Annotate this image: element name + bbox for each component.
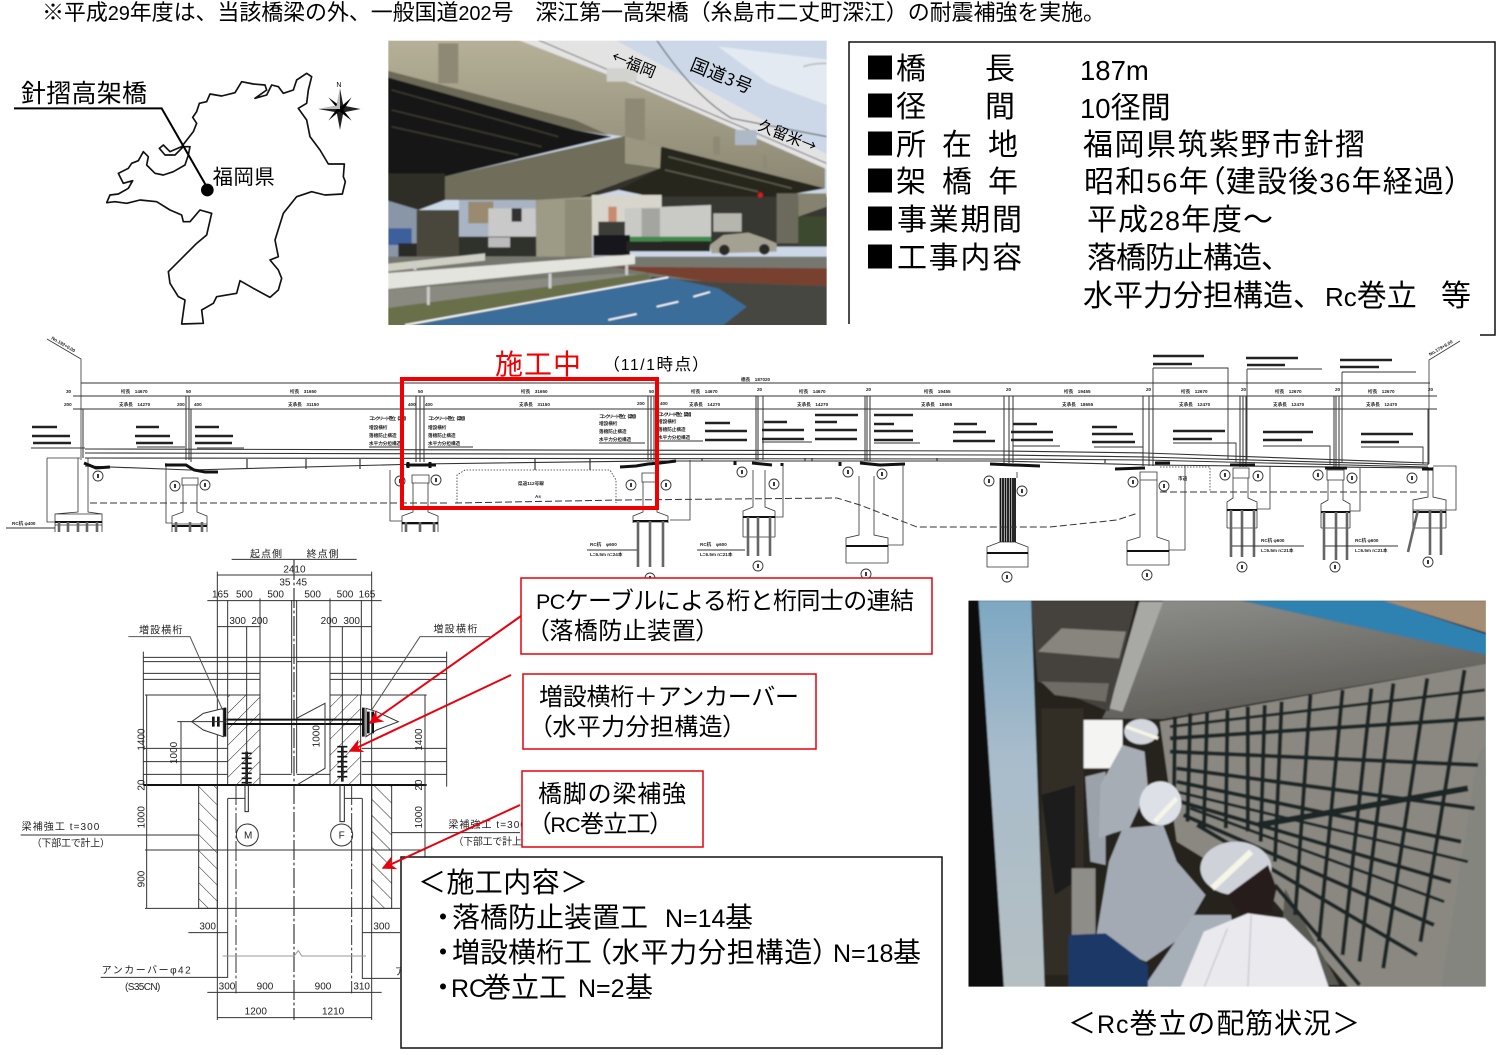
elevation dimension text: 20 (1428, 387, 1434, 392)
elevation dimension text: 400 (660, 401, 668, 406)
elevation dimension text: RC杭 φ600 (700, 541, 727, 548)
elevation dimension text: 20 (1335, 387, 1341, 392)
dimension labels: 終点側 (307, 547, 339, 560)
elevation dimension text: 50 (418, 389, 424, 394)
photo label: to Kurume: 久留米→ (755, 114, 820, 157)
dimension labels: 200 (251, 616, 268, 627)
elevation dimension text: 20 (757, 387, 763, 392)
ground line (90, 492, 1427, 527)
pier P5 (743, 463, 783, 537)
elevation dimension text (12, 336, 1454, 558)
dimension labels: 900 (257, 981, 274, 992)
spec: length (865, 44, 1149, 88)
elevation dimension text: L=6.5m n=21本 (700, 551, 733, 558)
photo scene (385, 40, 832, 327)
girder slab lines (143, 652, 447, 787)
bearing symbol M: M (244, 831, 252, 842)
elevation dimension text: コンクリート巻立（梁幅） (428, 415, 468, 422)
rebar grid (1170, 670, 1485, 985)
callout: pier beam reinforcement (522, 771, 703, 847)
dimension labels: 300 (373, 921, 390, 932)
dimension labels: 200 (321, 616, 338, 627)
elevation dimension text: 増設横桁 (428, 424, 447, 431)
elevation dimension text: 落橋防止構造 (658, 426, 686, 433)
workers (1085, 772, 1106, 865)
anchor plates (213, 708, 373, 737)
elevation dimension text: 20 (866, 387, 872, 392)
photo scene (960, 595, 1495, 995)
elevation dimension text: 支承長 12470 (1273, 401, 1305, 408)
work item: bridge fall prevention: ・ (429, 902, 457, 933)
dimension labels: （下部工で計上） (32, 838, 110, 850)
label: under construction: 施工中 (495, 349, 581, 380)
spec: location: 所 (896, 129, 926, 162)
dimension lines side (145, 695, 425, 908)
elevation dimension text: No.179+6.00 (1428, 339, 1454, 357)
elevation dimension text: 50 (649, 389, 655, 394)
elevation dimension text: 県道112号線 (518, 480, 544, 487)
work item: RC jacketing: N=2 (578, 975, 625, 1003)
elevation dimension text: 200 (64, 402, 72, 407)
panel: work contents (401, 857, 942, 1048)
lower hatched RC jacket (199, 785, 392, 908)
spec: project period: 事業期間 (897, 204, 1022, 237)
photo: rebar work under the beam (960, 595, 1495, 995)
upper dimensions (207, 559, 382, 627)
elevation dimension text: コンクリート巻立（梁幅） (369, 415, 409, 422)
dimension labels: 20 (414, 779, 425, 791)
elevation dimension text: 桁長 14670 (691, 388, 718, 395)
spec: work details: Rc巻立 (1325, 280, 1417, 313)
icon: compass rose: N (336, 82, 341, 89)
spec: year built (865, 157, 1460, 201)
annotation leaders (31, 368, 1423, 464)
work item: added cross girder: ・ (429, 937, 457, 968)
pier P8 (1127, 465, 1185, 565)
callout: PC cable: PCケーブルによる桁と桁同士の連結 (536, 588, 914, 615)
spec: length: 橋 (896, 53, 926, 86)
dimension labels: アンカーバーφ42 (102, 964, 191, 976)
elevation dimension text: 桁長 12670 (1181, 388, 1208, 395)
spec: work details: 落橋防止構造、 (1087, 242, 1291, 275)
elevation dimension text: 桁長 19455 (924, 388, 951, 395)
elevation dimension text: 200 (177, 402, 185, 407)
arrow: RC jacket (383, 805, 520, 868)
abutment A2 (1413, 466, 1456, 528)
elevation dimension text: RC杭 φ400 (12, 520, 36, 527)
elevation dimension text: 20 (1241, 387, 1247, 392)
dimension labels: ア (395, 967, 405, 978)
break line (223, 951, 366, 956)
spec: spans: ■ (865, 82, 895, 126)
dimension labels: 900 (137, 870, 148, 887)
dimension labels: 300 (343, 616, 360, 627)
elevation dimension text: RC杭 φ600 (1261, 537, 1285, 544)
map outline (107, 73, 345, 324)
spec: location: 福岡県筑紫野市針摺 (1083, 129, 1365, 162)
bearing symbol M (236, 824, 258, 846)
elevation dimension text: 桁長 31650 (521, 388, 548, 395)
spec: location: ■ (865, 120, 895, 164)
spec: project period: ■ (865, 195, 895, 239)
dimension labels: 1200 (245, 1007, 267, 1018)
vertical guide lines (217, 572, 372, 1020)
dimension labels: 1400 (137, 728, 148, 751)
spec: length: 長 (985, 53, 1015, 86)
elevation dimension text: 400 (194, 402, 202, 407)
cable anchor right (366, 708, 398, 737)
elevation dimension text: 支承長 18655 (921, 401, 953, 408)
abutment end lines (47, 339, 1460, 464)
location map of Fukuoka (14, 73, 361, 324)
beam top plate (143, 782, 427, 788)
arrow: PC cable (370, 616, 521, 723)
center line (292, 560, 296, 1020)
stiffener ticks (247, 458, 1105, 470)
elevation dimension text: 30 (66, 389, 72, 394)
spec: work details: 等 (1441, 280, 1471, 313)
pier P4 (633, 460, 690, 523)
elevation dimension text: RC杭 φ600 (1355, 537, 1379, 544)
dimension labels: 165 (212, 590, 229, 601)
diagonal brace (297, 703, 325, 785)
elevation dimension text: 桁長 14670 (799, 388, 826, 395)
spec: work details: 水平力分担構造、 (1083, 280, 1323, 313)
pier P9 (1227, 466, 1270, 528)
dimension labels: 20 (137, 779, 148, 791)
dimension labels: 300 (229, 616, 246, 627)
elevation dimension text: 橋長 187020 (741, 376, 771, 383)
elevation dimension text: L=6.5m n=24本 (590, 551, 623, 558)
struck-out annotations (32, 356, 1413, 443)
elevation dimension text: 水平力分担構造 (658, 434, 691, 441)
dimension labels: 35 (279, 577, 291, 588)
dimension labels: 1400 (414, 728, 425, 751)
photo caption: ＜Rc巻立の配筋状況＞ (1068, 1008, 1360, 1039)
dimension labels: 増設横桁 (433, 622, 477, 635)
dimension labels: 300 (199, 921, 216, 932)
deck (85, 449, 1428, 470)
spec: location: 在 (942, 129, 972, 162)
photo: viaduct from road level (385, 40, 832, 327)
work item: RC jacketing: 基 (625, 972, 653, 1003)
elevation dimension text: 増設横桁 (599, 420, 618, 427)
elevation dimension text: No.192+0.00 (50, 336, 76, 353)
callout: PC cable (521, 578, 932, 654)
elevation dimension text: 支承長 18655 (1062, 401, 1094, 408)
red highlight box around work section (402, 379, 657, 508)
dimension labels: 500 (337, 590, 354, 601)
elevation dimension text: コンクリート巻立（梁幅） (658, 411, 694, 418)
elevation dimension text: 増設横桁 (369, 424, 388, 431)
dimension labels: 1210 (322, 1007, 345, 1018)
photo label: Route 3: 国道3号 (687, 51, 757, 99)
leader lines for added cross girder (128, 637, 490, 710)
piles (59, 510, 1441, 567)
work contents heading: ＜施工内容＞ (418, 867, 588, 898)
arrow: added cross girder (350, 675, 511, 751)
icon: compass rose (318, 82, 361, 130)
work item: added cross girder, count: N=18 (833, 940, 893, 968)
label: bridge name: 針摺高架橋 (21, 80, 147, 108)
elevation dimension text: L=6.5m n=21本 (1261, 547, 1294, 554)
dimension labels: （下部工で計上） (453, 836, 532, 848)
spec panel frame (849, 42, 1495, 335)
spec: work details (865, 233, 1471, 313)
elevation dimension text: 桁長 19455 (1064, 388, 1091, 395)
dimension labels: 起点側 (250, 547, 282, 560)
dimension labels: 1000 (311, 725, 322, 747)
elevation dimension text: 20 (1006, 387, 1012, 392)
elevation dimension text: 落橋防止構造 (428, 432, 456, 439)
dimension labels: 310 (353, 981, 370, 992)
spec: spans (865, 82, 1171, 126)
dimension lines (73, 383, 1437, 409)
reference circles (93, 467, 1433, 583)
elevation dimension text: 桁長 31650 (290, 388, 317, 395)
cross-section drawing at pier (21, 547, 532, 1020)
dimension labels: 2410 (283, 565, 306, 576)
work item: bridge fall prevention: 落橋防止装置工 (452, 902, 648, 933)
dimension labels: 増設横桁 (139, 624, 182, 637)
dimension labels (22, 547, 532, 1018)
spec: spans: 間 (985, 91, 1015, 124)
dimension labels: 45 (296, 577, 308, 588)
label: as of date: （11/1時点） (611, 355, 701, 374)
spec: year built: 架 (896, 166, 926, 199)
dimension labels: 1000 (414, 806, 425, 828)
pier P6 (846, 464, 903, 563)
callout: PC cable: （落橋防止装置） (537, 618, 708, 645)
elevation dimension text: 桁長 14670 (121, 388, 148, 395)
spec: work details: ■ (865, 233, 895, 277)
panel: bridge specifications (849, 42, 1495, 335)
elevation drawing of the viaduct (6, 339, 1460, 583)
callout: added cross girder: 増設横桁＋アンカーバー (539, 684, 799, 711)
spec: project period: 平成28年度～ (1087, 204, 1273, 237)
PC cable (227, 720, 363, 724)
callout: pier beam reinforcement: （RC巻立工） (539, 811, 662, 838)
work item: bridge fall prevention: 基 (725, 902, 753, 933)
work item: bridge fall prevention: N=14 (665, 905, 726, 933)
spec: year built: 橋 (942, 166, 972, 199)
location dot (201, 184, 214, 196)
elevation dimension text: 支承長 31150 (519, 401, 550, 408)
work item: added cross girder, detail: （水平力分担構造） (597, 937, 827, 968)
elevation dimension text: 市道 (1178, 475, 1188, 482)
elevation dimension text: L=6.5m n=21本 (1355, 547, 1388, 554)
elevation dimension text: 50 (186, 389, 192, 394)
work contents frame (401, 857, 942, 1048)
abutment A1 (47, 458, 102, 532)
bearings (84, 461, 1433, 472)
dimension labels: 300 (219, 981, 236, 992)
spec: location: 地 (988, 129, 1018, 162)
top note: ※平成29年度は、当該橋梁の外、一般国道202号 深江第一高架橋（糸島市二丈町深江）の耐震補強を実施。 (42, 0, 1105, 25)
pier P3 (390, 470, 438, 532)
elevation dimension text: As (535, 494, 541, 499)
elevation dimension text: 増設横桁 (658, 418, 677, 425)
dimension labels: (S35CN) (125, 982, 160, 993)
callout: added cross girder: （水平力分担構造） (540, 714, 735, 741)
spec: work details: 工事内容 (897, 242, 1022, 275)
dimension labels: 1000 (169, 741, 180, 764)
hatched cross beam areas (228, 695, 361, 785)
pier P10 (1321, 468, 1360, 528)
work item: added cross girder, count: 基 (893, 937, 921, 968)
dashed pile guides (236, 785, 352, 993)
photo label: to Fukuoka: ←福岡 (608, 45, 659, 83)
spec: year built: ■ (865, 157, 895, 201)
label: prefecture: 福岡県 (213, 166, 275, 189)
dimension labels: 165 (359, 590, 376, 601)
elevation dimension text: 支承長 14270 (689, 401, 721, 408)
black hatched pier shaft (1000, 478, 1015, 542)
elevation dimension text: 水平力分担構造 (369, 440, 402, 447)
elevation dimension text: コンクリート巻立（梁幅） (599, 413, 639, 420)
elevation dimension text: RC杭 φ600 (590, 541, 617, 548)
cable anchor left (192, 708, 223, 737)
anchor rods (247, 747, 342, 785)
elevation dimension text: 支承長 31150 (288, 401, 319, 408)
work item: added cross girder: 増設横桁工 (452, 937, 592, 968)
spec: length: ■ (865, 44, 895, 88)
elevation dimension text: 200 (637, 401, 645, 406)
leader line to bridge location (14, 108, 207, 187)
elevation dimension text: 水平力分担構造 (599, 436, 632, 443)
spec: location (865, 120, 1365, 164)
elevation dimension text: 支承長 12470 (1366, 401, 1398, 408)
pile notes lines (6, 528, 1398, 550)
pier P7 (987, 472, 1028, 567)
spec: year built: 年 (988, 166, 1018, 199)
spec: length: 187m (1080, 55, 1149, 86)
callout: added cross girder (523, 674, 816, 749)
elevation dimension text: 落橋防止構造 (599, 428, 627, 435)
elevation dimension text: 桁長 12670 (1275, 388, 1302, 395)
elevation dimension text: 20 (1146, 387, 1152, 392)
anchor bar lines (21, 798, 520, 1018)
elevation dimension text: 落橋防止構造 (369, 432, 397, 439)
dimension labels: 500 (267, 590, 284, 601)
bearing symbol F: F (339, 831, 345, 842)
elevation dimension text: 支承長 12470 (1179, 401, 1211, 408)
spec: spans: 径 (896, 91, 926, 124)
work item: RC jacketing: 巻立工 (483, 972, 567, 1003)
elevation dimension text: 桁長 12670 (1368, 388, 1395, 395)
expansion joints (83, 396, 1428, 468)
dimension labels: 900 (315, 981, 332, 992)
dimension labels: 1000 (137, 806, 148, 828)
dimension labels: 梁補強工 t=300 (22, 820, 100, 833)
work item: RC jacketing: RC (451, 975, 487, 1003)
callout: pier beam reinforcement: 橋脚の梁補強 (538, 781, 686, 808)
elevation dimension text: 400 (408, 402, 416, 407)
dimension labels: 梁補強工 t=300 (448, 818, 526, 831)
work item: RC jacketing: ・ (429, 972, 457, 1003)
anchor springs (242, 747, 347, 783)
bearing symbol F (331, 824, 353, 846)
elevation dimension text: 400 (425, 402, 433, 407)
elevation dimension text: 水平力分担構造 (428, 440, 461, 447)
spec: project period (865, 195, 1273, 239)
pier P2 (166, 463, 207, 532)
dimension labels: 500 (304, 590, 321, 601)
elevation dimension text: 支承長 14270 (119, 401, 151, 408)
spec: year built: 昭和56年（建設後36年経過） (1084, 166, 1460, 199)
spec: spans: 10径間 (1080, 92, 1171, 125)
elevation dimension text: 支承長 14270 (797, 401, 829, 408)
clearance outlines (457, 467, 1210, 503)
thick footing bars (55, 510, 1446, 553)
dimension labels: 500 (236, 590, 253, 601)
